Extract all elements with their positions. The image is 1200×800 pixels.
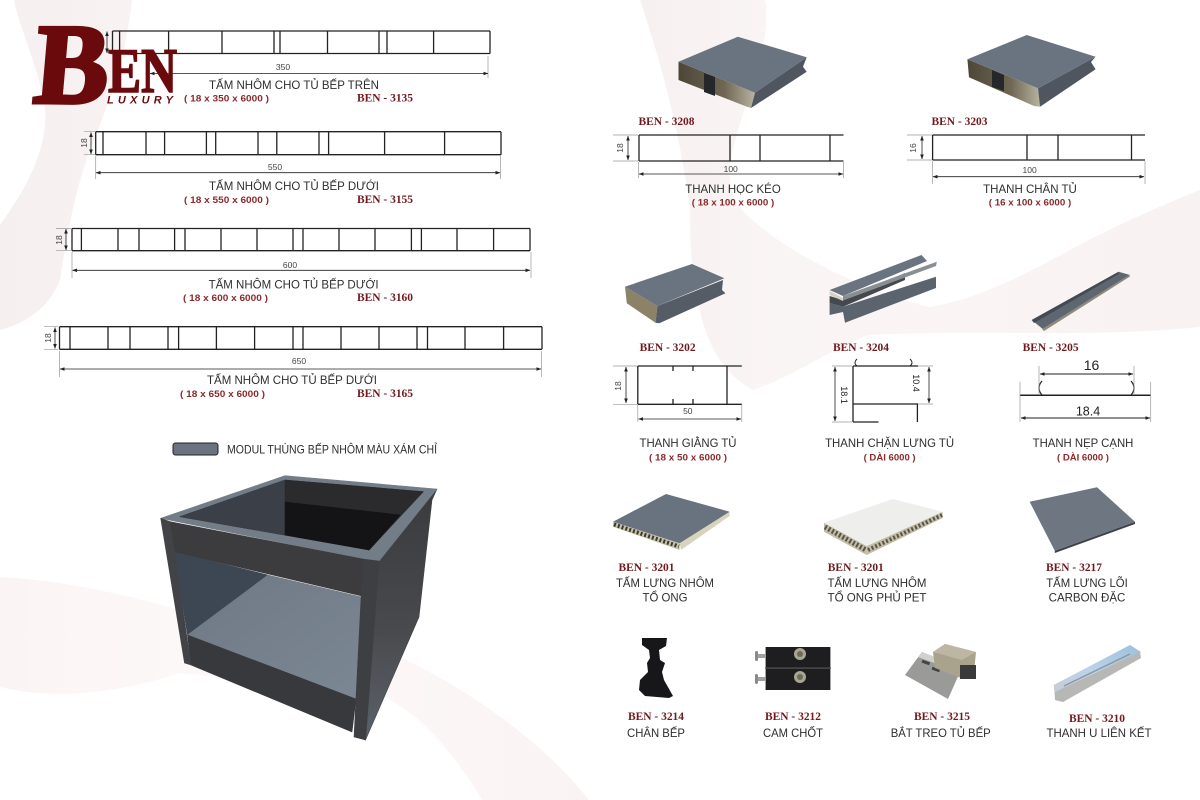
title: TỔ ONG (642, 590, 688, 604)
size: ( DÀI 6000 ) (864, 452, 916, 464)
cross-section (853, 366, 918, 422)
cross-section (933, 135, 1145, 160)
cross-section (1020, 394, 1151, 396)
cross-section (639, 135, 844, 161)
code: BEN - 3201 (828, 562, 884, 574)
dimensions: 100 (724, 164, 738, 174)
background ribbon: lower left and sweep (0, 577, 589, 800)
panel 3155 dimensions: 550 (268, 162, 282, 172)
panel 3135 size: ( 18 x 350 x 6000 ) (184, 94, 269, 104)
dimensions: 18 (615, 143, 625, 153)
panel 3155 cross-section (96, 132, 501, 155)
logo: BEN Luxury (30, 1, 177, 127)
code: BEN - 3214 (628, 711, 684, 723)
panel 3155 dimensions: 18 (79, 138, 89, 148)
group: panel 3165 (43, 327, 542, 400)
size: ( DÀI 6000 ) (1057, 452, 1109, 464)
product 3203 (907, 35, 1145, 208)
title: TẤM LƯNG NHÔM (616, 575, 714, 590)
product 3210 (1046, 645, 1152, 740)
icon: 3205 profile (1032, 272, 1130, 331)
panel 3165 size: ( 18 x 650 x 6000 ) (180, 389, 265, 400)
dimensions (613, 135, 844, 178)
code: BEN - 3204 (833, 342, 889, 354)
product 3202 (613, 264, 742, 464)
panel 3155 code: BEN - 3155 (357, 194, 413, 206)
cross-section (638, 366, 742, 404)
panel 3160 code: BEN - 3160 (357, 292, 413, 304)
title: THANH HỌC KÉO (685, 181, 781, 196)
size: ( 18 x 50 x 6000 ) (649, 452, 727, 464)
dimensions: 50 (683, 406, 693, 416)
panel 3155 size: ( 18 x 550 x 6000 ) (184, 195, 269, 206)
group: panel 3135 (107, 31, 490, 104)
panel 3155 title: TẤM NHÔM CHO TỦ BẾP DƯỚI (209, 178, 379, 193)
dimensions (1020, 357, 1151, 422)
dimensions: 16 (1084, 357, 1099, 373)
group: panel 3160 (54, 228, 531, 304)
logo: BEN Luxury: B (30, 1, 115, 127)
dimensions (832, 366, 933, 422)
legend: grey module colour: MODUL THÙNG BẾP NHÔM MÀU XÁM CHỈ (227, 442, 438, 456)
product 3208 (613, 37, 844, 209)
title: THANH CHÂN TỦ (983, 181, 1077, 196)
code: BEN - 3215 (914, 711, 970, 723)
background ribbon: upper right (640, 0, 1200, 390)
icon: U connecting rail (1054, 645, 1141, 702)
title: TẤM LƯNG LÕI (1046, 575, 1128, 590)
panel 3165 cross-section (60, 327, 542, 349)
icon: cabinet hanging bracket (905, 644, 976, 699)
title: TỔ ONG PHỦ PET (828, 590, 927, 604)
icon: 3208 profile (678, 37, 807, 108)
panel 3135 cross-section (112, 31, 490, 54)
panel 3135 dimension: 350 (276, 62, 290, 72)
icon: honeycomb panel (613, 494, 730, 550)
clip curls (1039, 381, 1134, 395)
background ribbon: upper left (0, 0, 132, 330)
logo: BEN Luxury: LUXURY (107, 94, 175, 106)
title (1046, 575, 1128, 604)
icon: kitchen adjustable foot (639, 638, 673, 698)
legend: grey module colour (173, 442, 438, 456)
product 3217 (1030, 487, 1135, 604)
product 3205 (1020, 272, 1151, 464)
icon: solid carbon panel (1030, 487, 1135, 553)
panel 3165 title: TẤM NHÔM CHO TỦ BẾP DƯỚI (207, 372, 377, 387)
clip curls (855, 359, 912, 366)
dimensions: 18 (613, 381, 623, 391)
dimensions (907, 135, 1145, 184)
code: BEN - 3208 (638, 116, 695, 128)
product 3201 honeycomb (613, 494, 730, 604)
panel 3165 dimensions (43, 327, 542, 377)
group: panel 3155 (79, 132, 501, 206)
title: THANH NẸP CẠNH (1033, 436, 1133, 450)
code: BEN - 3212 (765, 711, 821, 723)
dimensions: 100 (1023, 165, 1037, 175)
title: CHÂN BẾP (627, 725, 685, 740)
panel 3165 dimensions: 18 (43, 333, 53, 343)
title: THANH CHẶN LƯNG TỦ (825, 435, 954, 450)
dimensions (613, 366, 742, 422)
panel 3135 title: TẤM NHÔM CHO TỦ BẾP TRÊN (209, 77, 379, 92)
title (828, 575, 927, 604)
panel 3160 dimensions: 600 (283, 260, 297, 270)
title: THANH U LIÊN KẾT (1046, 725, 1152, 740)
title: BẮT TREO TỦ BẾP (891, 725, 991, 740)
code: BEN - 3203 (932, 116, 988, 128)
panel 3165 dimensions: 650 (292, 356, 306, 366)
product 3214 (627, 638, 685, 740)
code: BEN - 3217 (1046, 562, 1102, 574)
size: ( 18 x 100 x 6000 ) (692, 198, 774, 208)
dimensions: 10.4 (911, 374, 921, 392)
dimensions: 16 (908, 143, 918, 153)
code: BEN - 3210 (1069, 713, 1125, 725)
code: BEN - 3201 (618, 562, 675, 574)
icon: cam pin (755, 647, 831, 690)
panel 3160 cross-section (72, 228, 530, 251)
code: BEN - 3202 (640, 342, 696, 354)
dimensions: 18.1 (839, 386, 849, 404)
product 3212 (755, 647, 831, 740)
illustration: grey aluminium cabinet module (161, 476, 437, 740)
product 3201 honeycomb with PET (824, 499, 943, 604)
panel 3160 size: ( 18 x 600 x 6000 ) (183, 293, 268, 304)
title: THANH GIẰNG TỦ (640, 435, 736, 450)
panel 3160 dimensions: 18 (54, 235, 64, 245)
logo: BEN Luxury: EN (108, 35, 177, 106)
panel 3160 dimensions (54, 228, 531, 278)
size: ( 16 x 100 x 6000 ) (989, 198, 1071, 208)
icon: 3203 profile (967, 35, 1096, 107)
product 3215 (891, 644, 991, 740)
title: CAM CHỐT (763, 725, 824, 740)
title (616, 575, 714, 604)
panel 3165 code: BEN - 3165 (357, 388, 413, 400)
dimensions: 18.4 (1076, 404, 1100, 418)
icon: 3202 profile (625, 264, 726, 323)
product 3204 (825, 255, 954, 464)
panel 3135 code: BEN - 3135 (357, 92, 413, 104)
panel 3160 title: TẤM NHÔM CHO TỦ BẾP DƯỚI (209, 276, 379, 292)
icon: 3204 profile (830, 255, 937, 323)
title: CARBON ĐẶC (1049, 590, 1126, 604)
code: BEN - 3205 (1023, 342, 1079, 354)
title: TẤM LƯNG NHÔM (828, 575, 926, 590)
icon: PET honeycomb panel (824, 499, 943, 555)
panel 3155 dimensions (79, 132, 500, 179)
